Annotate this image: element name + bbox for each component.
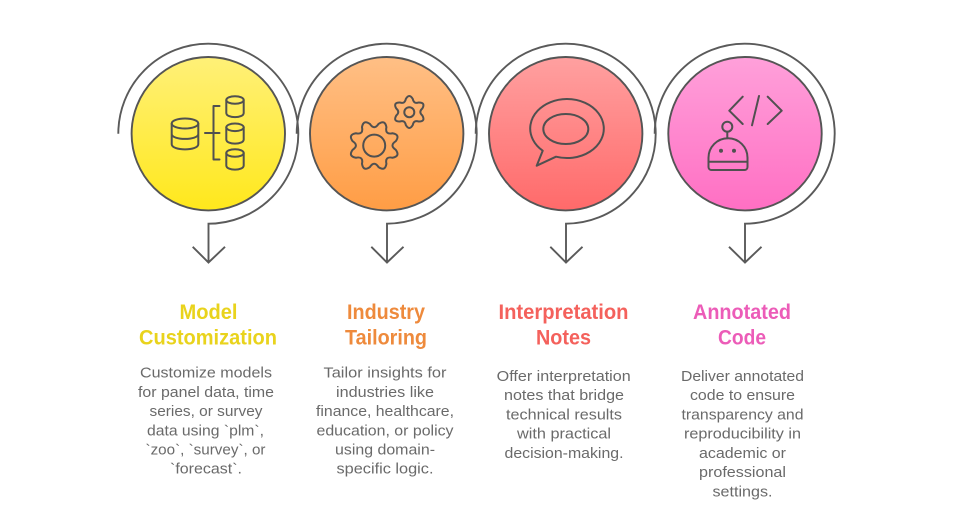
text: step 1 description: Customize models [140, 365, 272, 382]
arrow: step 4 ring and down arrow [655, 44, 835, 262]
heading: Industry Tailoring: Industry [347, 301, 425, 324]
text: step 1 description: `zoo`, `survey`, or [146, 441, 266, 458]
text: step 3 description: notes that bridge [504, 387, 624, 404]
circle: yellow [132, 57, 285, 210]
text: step 1 description [138, 365, 274, 478]
text: step 4 description: reproducibility in [684, 426, 801, 443]
heading: Annotated Code [693, 301, 791, 350]
text: step 4 description [681, 368, 804, 500]
text: step 4 description: transparency and [682, 406, 804, 423]
heading: Model Customization: Customization [139, 326, 277, 350]
text: step 4 description: code to ensure [690, 387, 795, 404]
heading: Model Customization: Model [180, 301, 238, 324]
icon: code and robot [708, 96, 782, 170]
heading: Interpretation Notes: Notes [536, 326, 591, 350]
text: step 4 description: professional [699, 464, 786, 481]
text: step 3 description: Offer interpretation [497, 368, 631, 385]
step 2: industry tailoring [297, 44, 477, 478]
heading: Annotated Code: Code [718, 326, 766, 350]
text: step 2 description: education, or policy [316, 422, 454, 439]
arrow: step 2 ring and down arrow [297, 44, 477, 262]
icon: gears [351, 96, 423, 169]
icon: databases [172, 96, 244, 170]
text: step 1 description: series, or survey [150, 403, 263, 420]
circle: pink [668, 57, 822, 210]
heading: Annotated Code: Annotated [693, 301, 791, 324]
heading: Industry Tailoring [345, 301, 427, 350]
step 3: interpretation notes [476, 44, 656, 462]
step 1: model customization [118, 44, 298, 478]
text: step 3 description [497, 368, 631, 462]
heading: Model Customization [139, 301, 277, 350]
text: step 2 description: Tailor insights for [324, 365, 446, 382]
arrow: step 1 ring and down arrow [118, 44, 298, 262]
text: step 1 description: for panel data, time [138, 384, 274, 401]
text: step 2 description: using domain- [335, 441, 435, 458]
text: step 1 description: `forecast`. [170, 461, 242, 478]
heading: Interpretation Notes: Interpretation [498, 301, 628, 324]
text: step 2 description: industries like [336, 384, 434, 401]
icon: speech bubble [530, 99, 604, 166]
text: step 3 description: technical results [506, 406, 622, 423]
text: step 3 description: decision-making. [504, 445, 624, 462]
text: step 2 description: specific logic. [336, 461, 434, 478]
text: step 4 description: academic or [699, 445, 786, 462]
text: step 4 description: Deliver annotated [681, 368, 804, 385]
text: step 3 description: with practical [516, 426, 611, 443]
circle: orange [310, 57, 463, 210]
heading: Interpretation Notes [498, 301, 628, 350]
text: step 1 description: data using `plm`, [147, 422, 264, 439]
circle: red [489, 57, 642, 210]
text: step 2 description: finance, healthcare, [316, 403, 454, 420]
text: step 2 description [316, 365, 454, 478]
heading: Industry Tailoring: Tailoring [345, 326, 427, 350]
text: step 4 description: settings. [712, 483, 772, 500]
step 4: annotated code [655, 44, 835, 500]
arrow: step 3 ring and down arrow [476, 44, 656, 262]
